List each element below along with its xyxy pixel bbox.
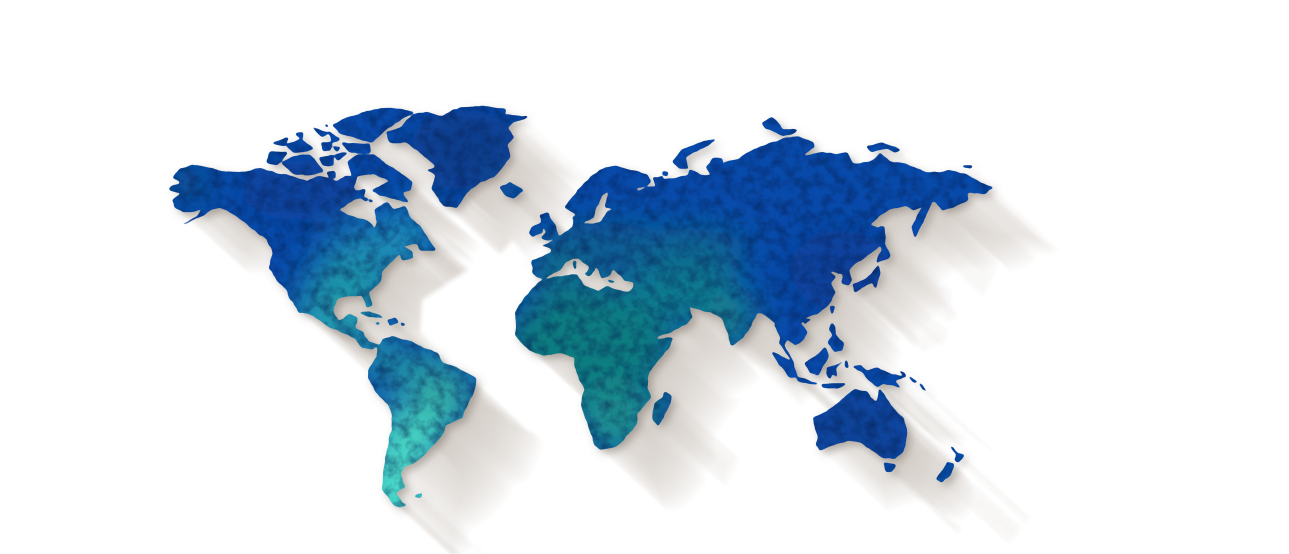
- continent: Australia: [813, 390, 907, 458]
- island: New Zealand: [936, 447, 964, 482]
- island: Greenland: [387, 107, 527, 207]
- island: New Guinea and Melanesia: [853, 365, 927, 391]
- region: European islands: [530, 213, 615, 282]
- island: Iceland: [500, 183, 523, 198]
- soft contact shadow around the coasts: [174, 111, 996, 511]
- region: Arctic Russian islands: [663, 118, 972, 176]
- island: Tasmania: [884, 463, 895, 472]
- shadow cut-out between the Americas and Africa: [420, 240, 560, 432]
- island: Madagascar: [653, 392, 671, 425]
- continent: Eurasia: [533, 137, 992, 362]
- continent: North America: [170, 165, 435, 349]
- continent: South America: [368, 337, 475, 507]
- continent: Africa: [515, 275, 673, 449]
- region: Canadian Arctic islands: [267, 108, 413, 202]
- island: Falklands: [415, 493, 422, 497]
- region: Caribbean islands: [360, 312, 405, 325]
- world map: [170, 107, 992, 507]
- long cast shadow of the continents: [170, 107, 992, 507]
- region: Japan and East Asian islands: [803, 227, 890, 323]
- region: Southeast Asian islands: [772, 323, 848, 389]
